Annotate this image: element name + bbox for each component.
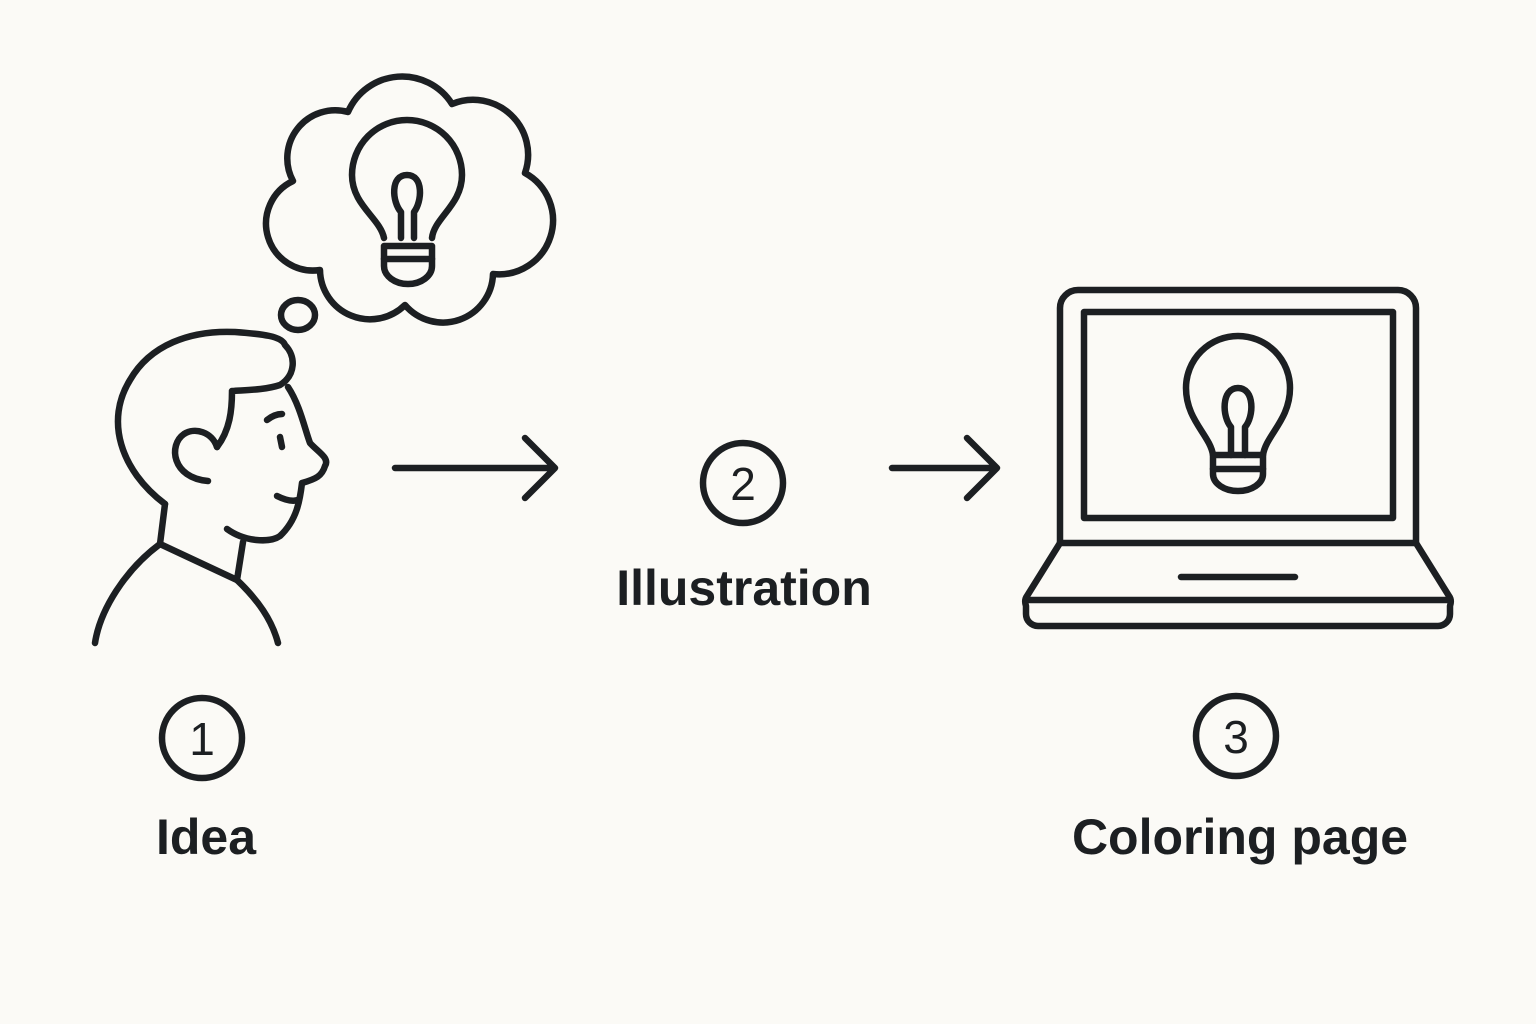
number 2: 2: [730, 458, 756, 510]
arrow 2: [892, 438, 997, 498]
step 2 badge: [703, 443, 783, 523]
label: Illustration: Illustration: [616, 560, 872, 616]
arrow 1: [395, 438, 555, 498]
icon: laptop: [1025, 290, 1451, 626]
icon: lightbulb on screen: [1186, 336, 1290, 491]
thought cloud: [266, 77, 553, 323]
number 1: 1: [189, 713, 215, 765]
label: Idea: Idea: [156, 809, 257, 865]
icon: person: [95, 332, 326, 643]
icon: lightbulb in cloud: [352, 120, 462, 284]
step 1 badge: [162, 698, 242, 778]
label: Coloring page: Coloring page: [1072, 809, 1408, 865]
step 3 badge: [1196, 696, 1276, 776]
thought bubble: [281, 300, 315, 330]
number 3: 3: [1223, 711, 1249, 763]
